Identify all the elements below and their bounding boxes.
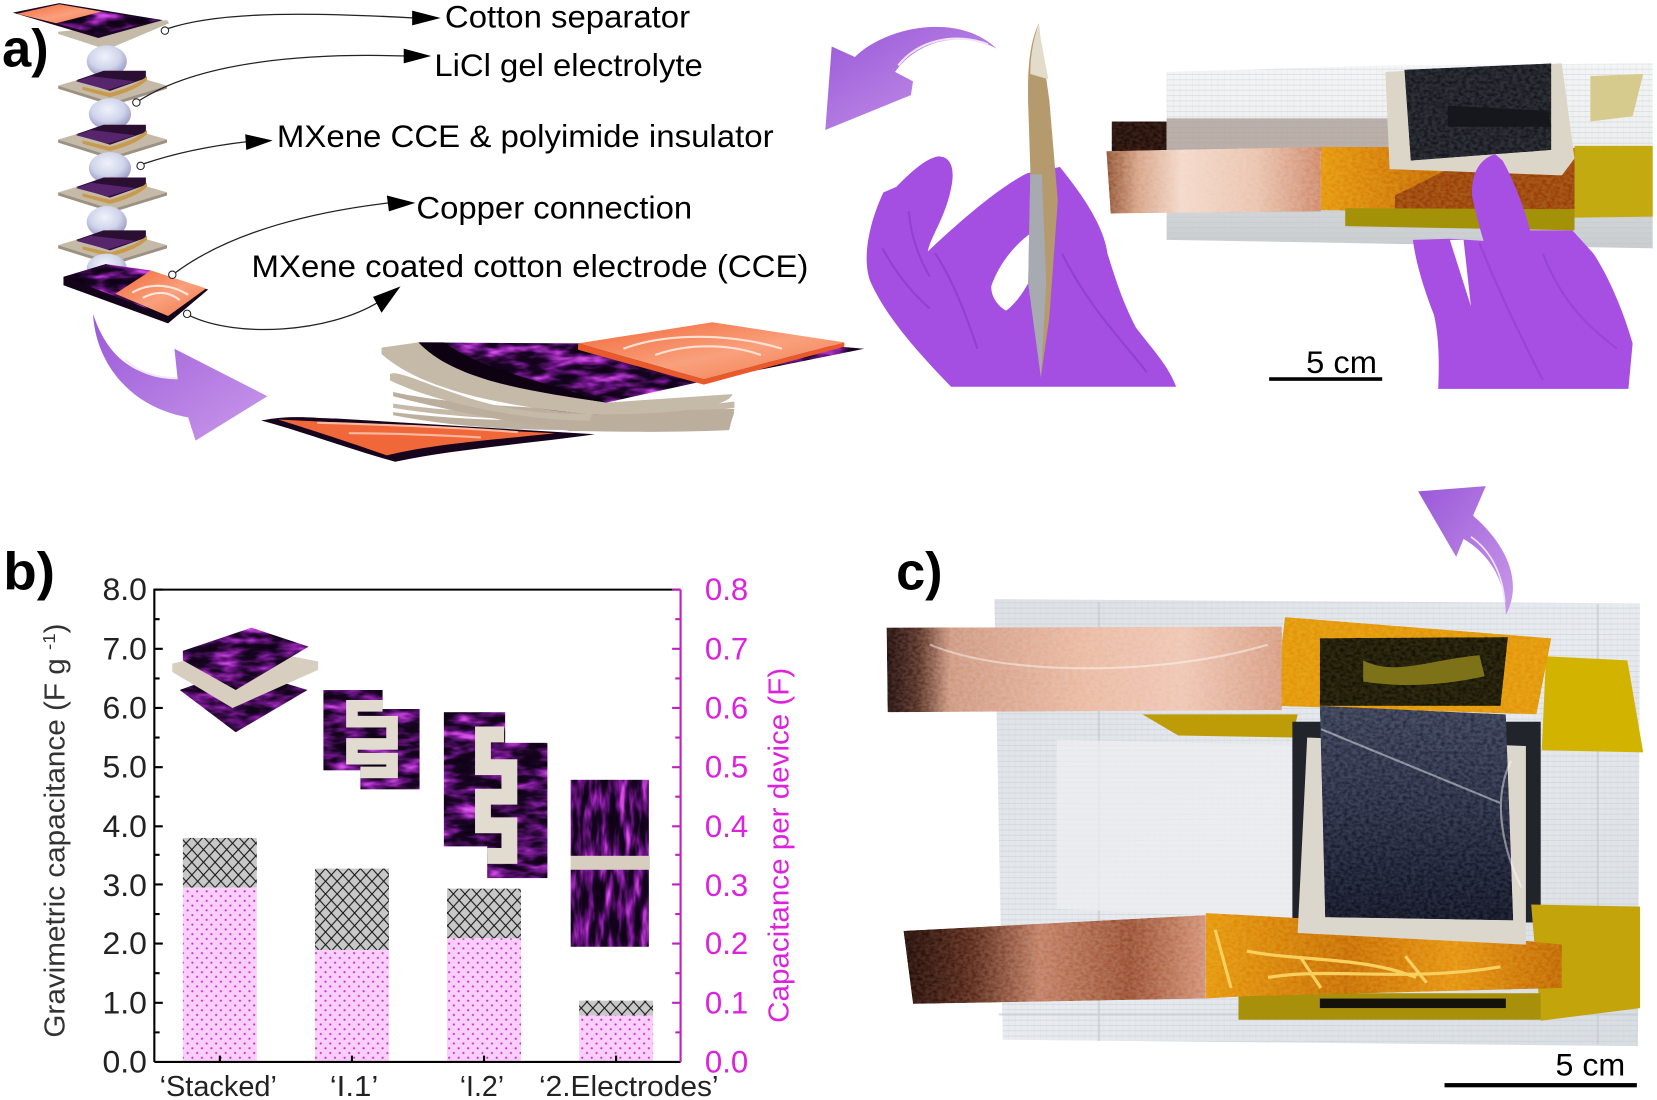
panel: a) device exploded view and flexing [2,0,864,462]
bottom yellow band [1238,993,1541,1020]
kapton tape [1321,147,1585,211]
left axis tick labels: 7.0 [103,630,147,666]
bars [183,838,653,1062]
leader: copper connection [169,195,415,278]
leader: LiCl gel electrolyte [133,49,431,106]
lower electrode [1320,706,1513,920]
dark-copper fold [1395,159,1575,211]
yellow bottom band [1345,208,1575,230]
x axis labels [160,1071,719,1100]
cotton separator frame [1298,738,1526,945]
pale yellow top right [1590,74,1643,122]
arrow: stack to bent device [93,314,267,441]
chart axes [154,590,681,1062]
kapton highlights [1215,930,1501,988]
black slit [1320,999,1506,1008]
yellow polyimide [1575,146,1653,218]
top kapton tape [1274,617,1551,714]
bar: I.1 [315,869,389,1062]
right axis title: Capacitance per device (F) [763,668,795,1023]
exploded layer stack [13,3,208,323]
bar: I.2 [447,889,521,1062]
device seen edge-on [1028,23,1058,377]
bar: 2.Electrodes [579,1001,653,1062]
icon: purple glove hand [867,156,1176,387]
panel label b: b) [3,543,55,602]
inset: I.2 configuration [444,712,547,878]
cotton frame [1385,63,1575,175]
label: MXene CCE and polyimide insulator: MXene CCE & polyimide insulator [277,118,774,154]
bottom copper strip [904,915,1206,1004]
right axis tick labels: 0.1 [705,984,748,1020]
right axis tick labels: 0.2 [705,925,748,961]
label: MXene coated cotton electrode: MXene coated cotton electrode (CCE) [252,248,808,284]
copper strip [1106,147,1321,213]
dark cell backing [1292,722,1541,922]
inset: two electrodes configuration [571,780,650,947]
pale window [1057,740,1294,919]
leader: MXene CCE and polyimide [137,134,273,170]
small yellow strip [1142,714,1298,738]
photo: hand holding flexed device [867,23,1176,387]
arrow: bottom curved up [1418,486,1513,615]
panel: b) capacitance bar chart [3,543,795,1100]
film reflections [930,645,1522,888]
thumb and fingers [1413,154,1633,389]
right axis tick labels: 0.5 [705,749,748,785]
inset: I.1 configuration [323,690,420,789]
right axis tick labels: 0.6 [705,690,748,726]
pouch bag [1167,63,1653,248]
left axis tick labels: 8.0 [103,571,147,607]
pouch bag [994,599,1640,1046]
scale bar: bottom 5 cm [1445,1047,1637,1087]
left axis title: ) [40,623,72,633]
bar: Stacked [183,838,257,1062]
arrow: top curved left [825,27,997,130]
panel: c) device photo [887,543,1643,1046]
left axis title: Gravimetric capacitance (F g [40,673,72,1038]
left axis tick labels: 0.0 [103,1044,147,1080]
label: LiCl gel electrolyte: LiCl gel electrolyte [434,47,703,83]
top copper strip [887,627,1282,712]
right axis tick labels: 0.0 [705,1044,748,1080]
label: copper connection: Copper connection [416,190,692,226]
dark copper tab [1112,122,1167,153]
left axis title: -1 [39,633,59,650]
upper electrode [1320,637,1508,706]
left axis tick labels: 2.0 [103,925,147,961]
bottom kapton tape [1206,913,1562,999]
black electrode [1404,63,1551,161]
translucent wrinkled band [1167,118,1389,152]
right axis tick labels: 0.3 [705,867,748,903]
bent device illustration [261,322,864,462]
photo: hand holding folded device [1106,63,1653,389]
right axis tick labels [705,571,748,1080]
right axis tick labels: 0.8 [705,571,748,607]
left axis tick labels: 1.0 [103,984,147,1020]
inset: stacked configuration [172,628,318,732]
panel label c: c) [896,543,943,602]
right axis tick labels: 0.7 [705,630,748,666]
right axis tick labels: 0.4 [705,808,748,844]
left axis tick labels: 3.0 [103,867,147,903]
left axis tick labels: 4.0 [103,808,147,844]
left axis tick labels: 5.0 [103,749,147,785]
left axis tick labels [103,571,147,1080]
scale bar: top 5 cm: 5 cm [1306,344,1377,380]
leader: cotton separator [161,11,441,34]
leader: coated cotton electrode [183,286,401,330]
bottom right yellow polyimide [1531,905,1640,1021]
scale bar: top 5 cm [1269,344,1382,381]
scale bar: bottom 5 cm: 5 cm [1555,1047,1625,1083]
right yellow polyimide [1542,656,1643,752]
panel label a: a) [2,20,49,79]
left axis tick labels: 6.0 [103,690,147,726]
